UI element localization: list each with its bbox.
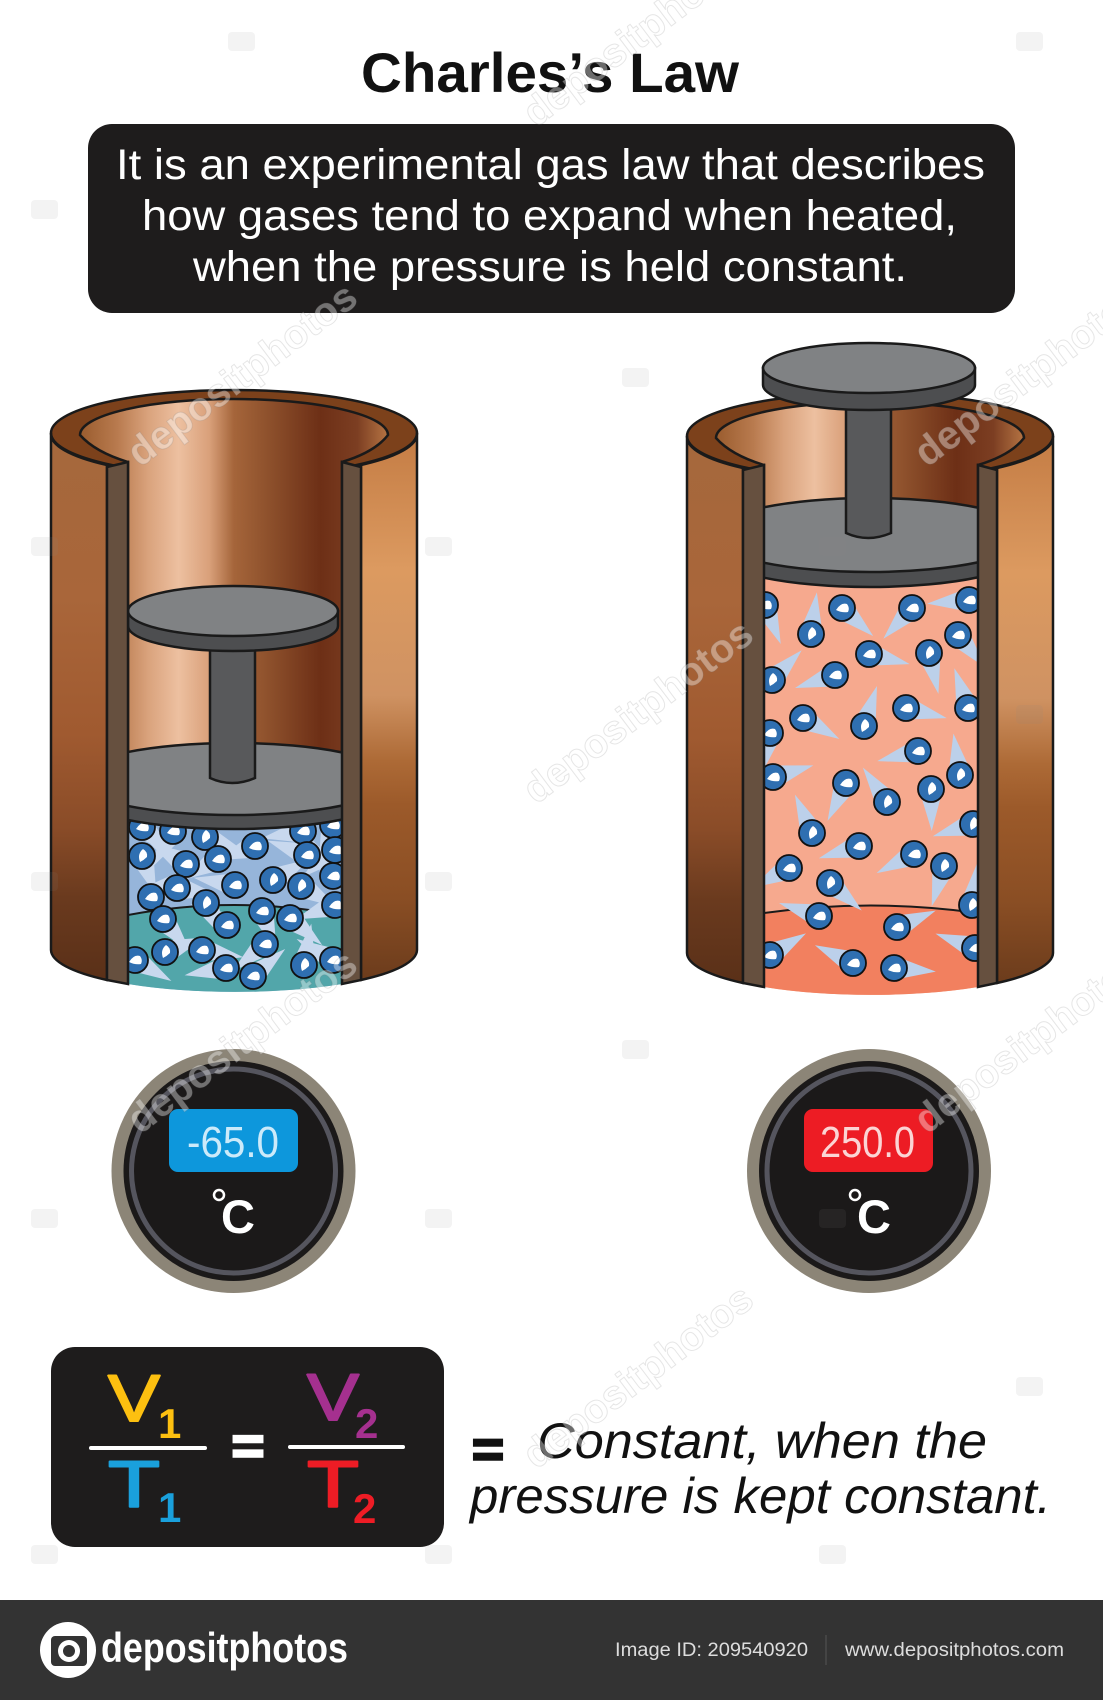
hot cylinder	[687, 343, 1053, 1003]
cold thermometer: -65.0	[187, 1118, 279, 1167]
watermarks: depositphotos	[119, 941, 365, 1142]
formula explanation: Constant, when the	[537, 1413, 987, 1469]
formula box: V	[108, 1361, 160, 1435]
formula box: =	[232, 1416, 264, 1476]
formula explanation	[468, 1413, 1051, 1524]
formula box: 2	[353, 1485, 376, 1532]
formula explanation: pressure is kept constant.	[468, 1468, 1051, 1524]
formula box: 1	[158, 1484, 181, 1531]
piston rod	[210, 640, 255, 783]
hot gas with molecules	[765, 578, 977, 995]
formula box: V	[307, 1360, 359, 1434]
watermarks: depositphotos	[515, 1276, 761, 1477]
cold thermometer: C	[221, 1190, 255, 1243]
footer logo icon	[40, 1622, 96, 1678]
footer bar	[0, 1600, 1103, 1700]
cold gas with molecules	[129, 821, 341, 992]
formula box: T	[108, 1447, 160, 1521]
definition box	[88, 124, 1015, 313]
title: Charles’s Law	[361, 41, 739, 104]
formula box	[51, 1347, 444, 1547]
watermarks: depositphotos	[515, 611, 761, 812]
piston plate	[128, 586, 338, 651]
definition box: when the pressure is held constant.	[192, 243, 907, 291]
piston rod	[846, 403, 891, 538]
footer bar: depositphotos	[101, 1624, 348, 1671]
formula explanation: =	[472, 1421, 504, 1479]
piston head	[765, 497, 977, 588]
piston head	[129, 742, 341, 830]
formula box: 2	[355, 1400, 378, 1447]
cold thermometer	[112, 1049, 356, 1293]
watermarks: depositphotos	[119, 274, 365, 475]
cold cylinder	[51, 390, 417, 1000]
formula box: 1	[158, 1400, 181, 1447]
hot thermometer: 250.0	[820, 1118, 915, 1167]
hot thermometer	[747, 1049, 991, 1293]
piston plate	[763, 343, 975, 410]
hot thermometer: C	[857, 1190, 891, 1243]
footer bar: Image ID: 209540920	[615, 1640, 808, 1661]
definition box: how gases tend to expand when heated,	[142, 192, 957, 240]
formula box: T	[307, 1447, 359, 1521]
footer bar: www.depositphotos.com	[844, 1640, 1064, 1661]
watermarks	[119, 0, 1103, 1477]
definition box: It is an experimental gas law that describes	[116, 141, 985, 189]
